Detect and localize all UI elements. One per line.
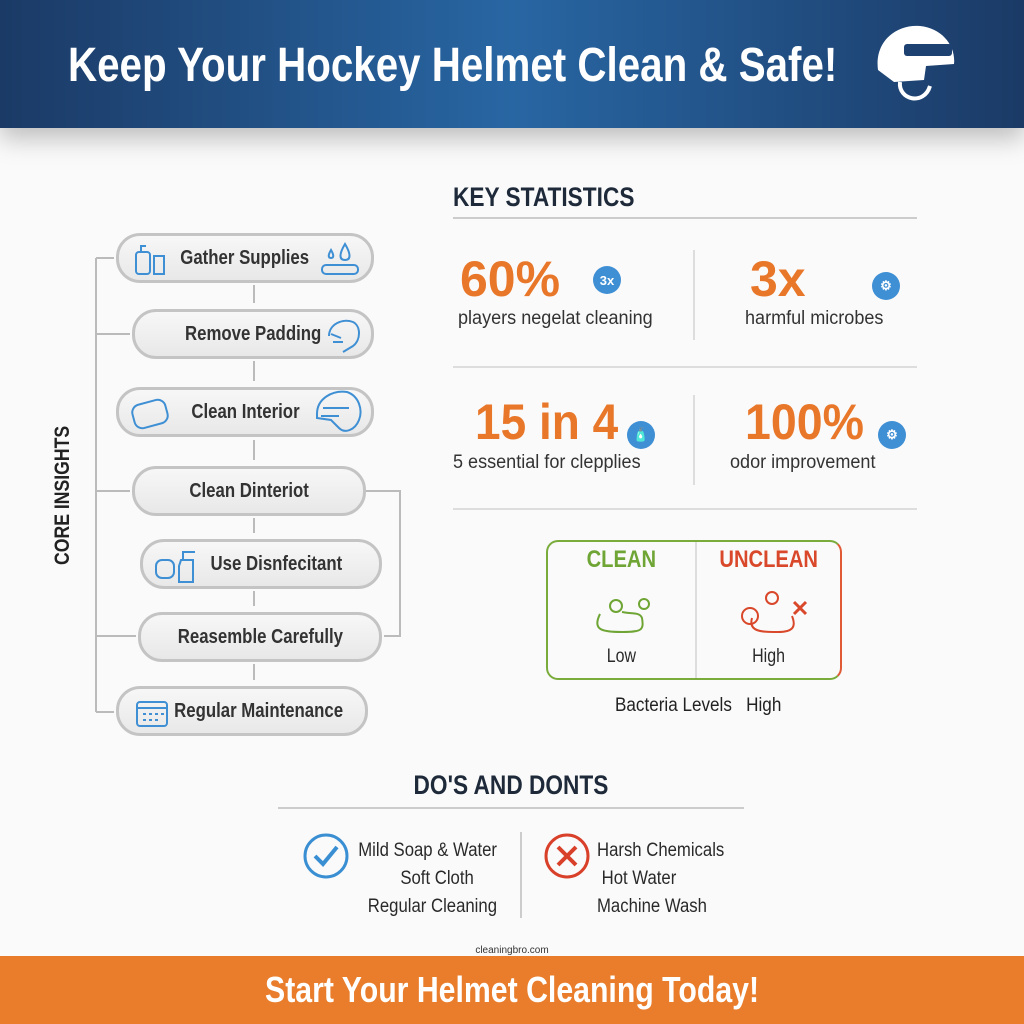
unclean side: UNCLEAN	[720, 546, 818, 573]
icon: helmet	[878, 26, 954, 100]
stat: 60%: 3x	[600, 272, 614, 288]
step: gather supplies	[116, 233, 374, 283]
stat: 15 in 4: 🧴	[633, 427, 649, 442]
caption: bacteria levels: Bacteria Levels High	[615, 695, 781, 716]
stat: 3x: harmful microbes	[745, 308, 883, 329]
stat: 3x: ⚙	[880, 278, 892, 293]
step: clean dinteriot	[132, 466, 366, 516]
stat: 60%: 60%	[460, 251, 560, 307]
step: remove padding	[132, 309, 374, 359]
title: Keep Your Hockey Helmet Clean & Safe!	[68, 39, 837, 92]
don'ts list: Hot Water	[602, 868, 676, 889]
stat: 100%: 100%	[745, 394, 864, 450]
heading: dos and donts: DO'S AND DONTS	[414, 770, 608, 800]
stat: 100%: odor improvement	[730, 452, 875, 473]
footer banner	[0, 956, 1024, 1024]
do's list: Soft Cloth	[400, 868, 474, 889]
stat: 100%: ⚙	[886, 427, 898, 442]
step: use disinfectant	[140, 539, 382, 589]
stat: 15 in 4: 5 essential for clepplies	[453, 452, 641, 473]
flowchart connectors	[95, 257, 401, 713]
clean side: CLEAN	[586, 546, 656, 573]
step: reassemble: Reasemble Carefully	[177, 626, 343, 648]
step: regular maintenance	[116, 686, 368, 736]
step: reassemble	[138, 612, 382, 662]
step: clean interior: Clean Interior	[191, 400, 299, 422]
header banner	[0, 0, 1024, 128]
stat: 100%	[730, 394, 906, 473]
step: clean interior	[116, 387, 374, 437]
icon: check	[304, 834, 348, 878]
comparison: clean vs unclean: High	[753, 646, 785, 667]
stat: 3x	[745, 251, 900, 329]
step: use disinfectant: Use Disnfecitant	[210, 552, 342, 574]
step: gather supplies: Gather Supplies	[181, 246, 309, 268]
stat: 15 in 4	[453, 394, 655, 473]
step: regular maintenance: Regular Maintenance	[174, 700, 343, 722]
do's list	[304, 834, 497, 917]
comparison: clean vs unclean	[546, 540, 842, 680]
don'ts list: Machine Wash	[597, 896, 707, 917]
source url: cleaningbro.com	[475, 945, 549, 956]
stat: 3x: 3x	[750, 251, 806, 307]
footer banner: Start Your Helmet Cleaning Today!	[265, 969, 759, 1010]
don'ts list	[544, 834, 724, 917]
do's list: Mild Soap & Water	[358, 840, 497, 861]
stat: 15 in 4: 15 in 4	[475, 394, 618, 450]
stat: 60%: players negelat cleaning	[458, 308, 653, 329]
step: remove padding: Remove Padding	[185, 322, 321, 344]
label: core insights: CORE INSIGHTS	[51, 426, 74, 565]
step: clean dinteriot: Clean Dinteriot	[189, 480, 309, 502]
stat: 60%	[458, 251, 653, 329]
icon: cross	[544, 834, 590, 878]
do's list: Regular Cleaning	[368, 896, 497, 917]
heading: key statistics: KEY STATISTICS	[453, 182, 634, 212]
don'ts list: Harsh Chemicals	[597, 840, 724, 861]
comparison: clean vs unclean: Low	[606, 646, 636, 667]
